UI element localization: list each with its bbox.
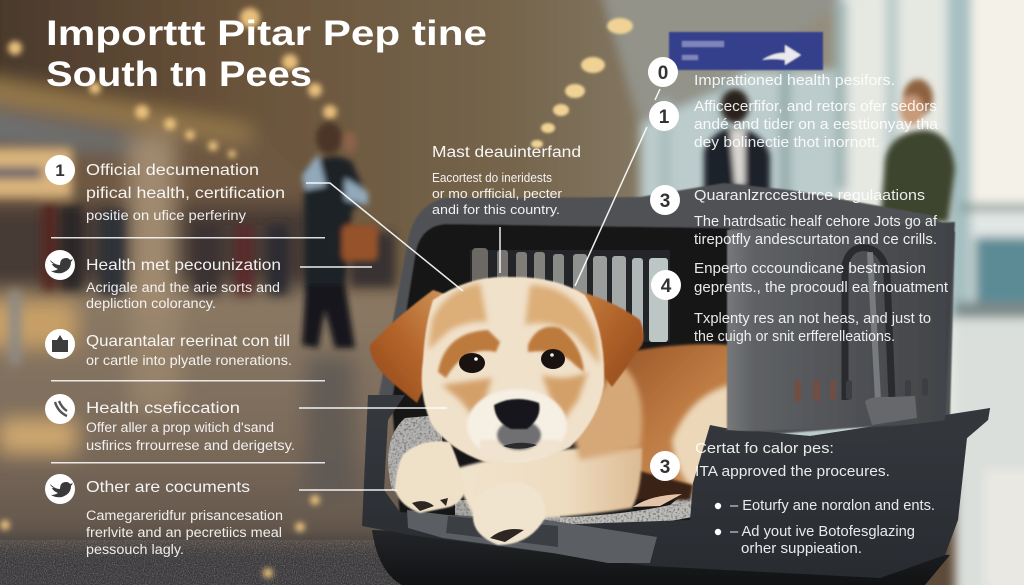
item 5: other documents: pessouch lagly.	[86, 542, 184, 557]
forehead tan	[428, 283, 600, 365]
brow patches	[438, 327, 584, 378]
cheek patches	[442, 372, 588, 425]
title: South tn Pees	[46, 55, 312, 94]
callout: centre note: Mast deauinterfand	[432, 144, 581, 161]
step 0: health papers	[648, 57, 895, 89]
step 4: procedure: the cuigh or snit erfferelleations.	[694, 329, 895, 345]
right eye	[541, 349, 565, 369]
foreleg and chest	[450, 448, 642, 528]
back paw	[633, 494, 682, 507]
item 5: other documents: Camegareridfur prisancesation	[86, 508, 283, 523]
step 1: certificate notes: dey bolinectie thot inornott.	[694, 135, 880, 151]
white chin fur	[480, 440, 560, 461]
item 1: official documentation	[45, 155, 285, 223]
background traveller: man with phone	[302, 122, 378, 348]
body	[575, 344, 730, 495]
item 1: official documentation: Official decumenation	[86, 162, 259, 179]
callout: centre note: Eacortest do ineridests	[432, 170, 552, 185]
item 1: official documentation: positie on ufice perferiny	[86, 208, 246, 223]
puppy	[362, 277, 990, 578]
lower tub	[372, 530, 950, 585]
item 3: quarantine: or cartle into plyatle ronerations.	[86, 353, 292, 368]
step 3: quarantine regulations: Quaranlzrccesturce regulaations	[694, 188, 925, 204]
item 3: quarantine: Quarantalar reerinat con till	[86, 333, 290, 350]
mouth	[503, 443, 537, 449]
callout: centre note: andi for this country.	[432, 202, 560, 217]
title: Importtt Pitar Pep tine	[46, 14, 487, 53]
cushion	[388, 415, 698, 529]
crate zip band	[545, 517, 692, 541]
left paw	[395, 441, 465, 513]
step 3: carrier requirements: ITA approved the proceures.	[695, 464, 890, 480]
step 4: procedure: 4	[661, 276, 672, 297]
nose	[494, 399, 540, 429]
white muzzle	[467, 389, 567, 461]
crate door panel	[725, 222, 990, 446]
step 4: procedure: Txplenty res an not heas, and just to	[694, 311, 931, 327]
step 4: procedure: Enperto cccoundicane bestmasion	[694, 261, 926, 277]
callout: centre note	[432, 144, 581, 217]
step 3: carrier requirements: orher suppieation.	[741, 541, 862, 557]
item 2: health pre-authorization: depliction colorancy.	[86, 296, 216, 311]
item 2: health pre-authorization: Acrigale and the arie sorts and	[86, 280, 280, 295]
item 5: other documents: Other are cocuments	[86, 479, 250, 496]
shadow under chest	[636, 470, 693, 500]
lights	[0, 8, 337, 578]
item 3: quarantine	[45, 329, 292, 368]
step 3: carrier requirements	[650, 441, 935, 557]
step 3: quarantine regulations: The hatrdsatic healf cehore Jots go af	[694, 214, 938, 230]
step 3: carrier requirements: 3	[660, 457, 670, 478]
step 4: procedure	[651, 261, 948, 345]
item 4: health certification: Offer aller a prop witich d'sand	[86, 420, 274, 435]
crate upper shell	[378, 183, 955, 520]
right paw	[473, 482, 545, 545]
neck fur	[570, 360, 642, 460]
background traveller: agent in suit	[704, 89, 770, 195]
step 3: quarantine regulations: tirepotfly andescurtaton and ce crills.	[694, 232, 937, 248]
background traveller: woman at counter	[880, 79, 955, 222]
title	[46, 14, 487, 94]
left eye	[459, 353, 485, 373]
step 1: certificate notes: Afficecerfifor, and retors ofer sedors	[694, 99, 937, 115]
crate front plates	[407, 510, 657, 563]
step 1: certificate notes: andé and tider on a eesttionyay tha	[694, 117, 939, 133]
item 4: health certification: Health cseficcation	[86, 400, 240, 417]
step 3: carrier requirements: – Eoturfy ane norαlon and ents.	[730, 498, 935, 514]
step 3: quarantine regulations: 3	[660, 191, 670, 212]
item 1: official documentation: pifical health, certification	[86, 185, 285, 202]
step 0: health papers: Imprattioned health pesifors.	[694, 73, 895, 89]
crate base shell	[362, 395, 990, 578]
item 2: health pre-authorization	[45, 250, 281, 311]
muzzle shadow	[497, 420, 541, 450]
right ear	[567, 288, 644, 387]
item 1: official documentation: 1	[55, 161, 65, 180]
item 4: health certification: usfirics frrourrese and derigetsy.	[86, 438, 295, 453]
step 3: carrier requirements: Certat fo calor pes:	[695, 441, 834, 457]
item 2: health pre-authorization: Health met pecounization	[86, 257, 281, 274]
item 5: other documents: frerlvite and an pecretiics meal	[86, 525, 282, 540]
step 3: quarantine regulations	[650, 185, 938, 248]
panel: right notes	[648, 57, 948, 557]
step 4: procedure: geprents., the procoudl ea fnouatment	[694, 280, 948, 296]
step 1: certificate notes: 1	[659, 107, 670, 128]
rump	[672, 385, 730, 488]
step 0: health papers: 0	[658, 63, 668, 84]
departure sign with arrow	[669, 32, 823, 70]
step 3: carrier requirements: – Ad yout ive Botofesglazing	[730, 524, 915, 540]
panel: left checklist	[45, 155, 325, 557]
item 4: health certification	[45, 394, 295, 453]
crate vent bars	[470, 248, 670, 342]
callout: centre note: or mo orfficial, pecter	[432, 186, 563, 201]
head	[422, 277, 604, 463]
leader lines to puppy	[299, 89, 660, 490]
left ear	[370, 290, 456, 403]
window side	[640, 70, 1024, 470]
step 1: certificate notes	[649, 99, 939, 151]
pet carrier crate	[372, 183, 955, 585]
item 5: other documents	[45, 474, 283, 557]
